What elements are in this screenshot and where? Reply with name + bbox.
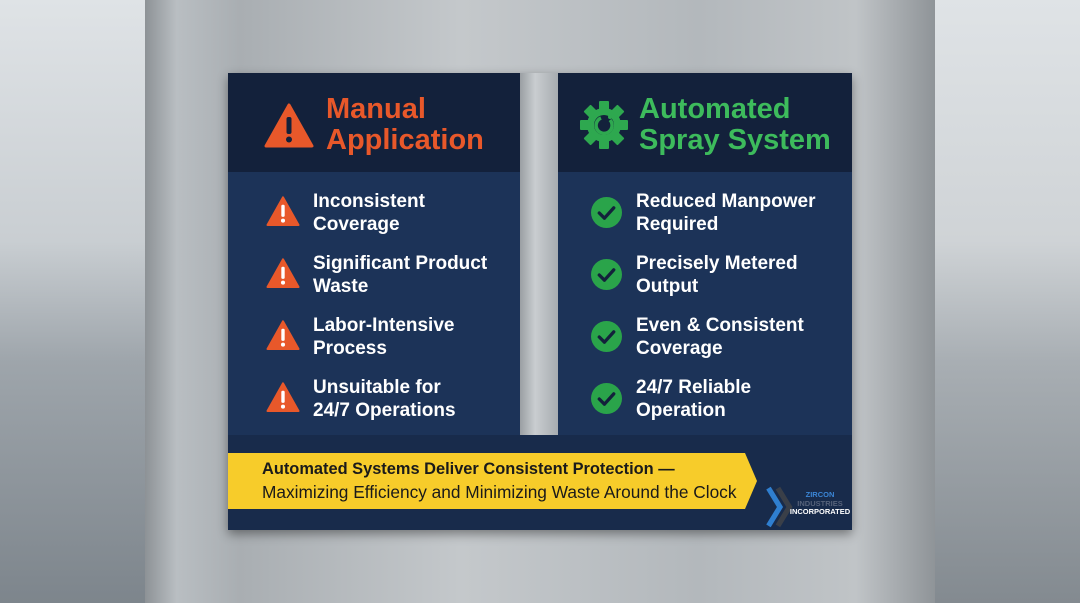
item 4: 24/7 Operations [313, 400, 456, 421]
item 1: Reduced Manpower [636, 191, 815, 212]
panel: automated spray system [580, 93, 831, 421]
item 2: Precisely Metered [636, 253, 798, 274]
item 2: Waste [313, 276, 368, 297]
logo: Zircon Industries: ZIRCON [806, 490, 834, 499]
item 3 [266, 315, 454, 359]
item 2 [591, 253, 798, 297]
sign [228, 73, 852, 530]
item 2 [266, 253, 487, 297]
background: steel panel [145, 0, 935, 603]
item 2: Output [636, 276, 698, 297]
panel: manual application [264, 93, 487, 421]
heading: Manual Application: Application [326, 124, 484, 156]
banner: yellow callout [228, 453, 757, 509]
item 4 [591, 377, 751, 421]
icon: gear [580, 101, 628, 149]
bottom dark strip [228, 435, 852, 530]
item 1: Coverage [313, 214, 400, 235]
item 1: Required [636, 214, 718, 235]
item 4: 24/7 Reliable [636, 377, 751, 398]
item 3: Coverage [636, 338, 723, 359]
logo: Zircon Industries [766, 486, 850, 528]
heading: Automated Spray System [639, 93, 831, 156]
item 3: Even & Consistent [636, 315, 804, 336]
heading: Automated Spray System: Automated [639, 93, 790, 125]
item 1 [591, 191, 816, 235]
item 3 [591, 315, 804, 359]
logo: Zircon Industries: INDUSTRIES [797, 498, 843, 508]
center steel strip [520, 73, 558, 435]
heading: Automated Spray System: Spray System [639, 124, 831, 156]
heading: Manual Application [326, 93, 484, 156]
item 4: Operation [636, 400, 726, 421]
item 4: Unsuitable for [313, 377, 441, 398]
icon: warning header [264, 103, 314, 148]
banner: yellow callout: Automated Systems Deliver Consistent Protection — [262, 460, 675, 478]
header band left [228, 73, 520, 172]
background: factory left [0, 0, 145, 603]
item 1: Inconsistent [313, 191, 425, 212]
item 4 [266, 377, 456, 421]
item 1 [266, 191, 425, 235]
header band right [558, 73, 852, 172]
banner: yellow callout: Maximizing Efficiency and Minimizing Waste Around the Clock [262, 482, 736, 502]
item 2: Significant Product [313, 253, 487, 274]
item 3: Labor-Intensive [313, 315, 454, 336]
background: factory right [935, 0, 1080, 603]
heading: Manual Application: Manual [326, 93, 426, 125]
logo: Zircon Industries: INCORPORATED [790, 507, 850, 516]
item 3: Process [313, 338, 387, 359]
